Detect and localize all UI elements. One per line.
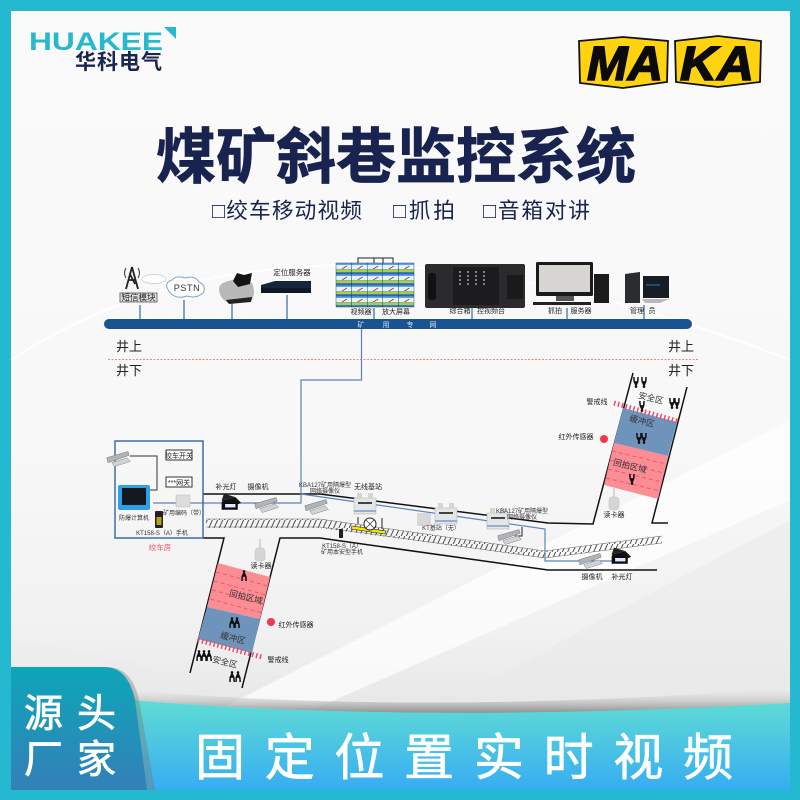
icon: printer [219, 273, 254, 304]
subtitle features: □抓拍 [393, 198, 455, 223]
equipment along the incline: KBA127矿用隔爆型 [496, 507, 548, 515]
side badge: 家 [77, 739, 116, 782]
logo: MA KA: KA [680, 38, 754, 91]
icon: PSTN cloud: PSTN [174, 283, 200, 293]
icon: SMS module [120, 267, 166, 302]
upper portal zones: 缓冲区 [628, 413, 656, 429]
bottom banner [130, 688, 790, 790]
winch room [107, 441, 205, 552]
integrated console: 控视频台 [477, 306, 505, 315]
capture computer: 服务器 [570, 306, 592, 315]
logo: MA KA [579, 36, 761, 91]
integrated console: 综合箱 [450, 306, 470, 315]
lower portal zones: 红外传感器 [278, 620, 314, 629]
bottom banner: 固定位置实时视频 [195, 730, 733, 786]
equipment along the incline: 补光灯 [612, 572, 632, 581]
upper portal zones: 警戒线 [586, 397, 608, 406]
lower portal zones: 警戒线 [268, 655, 288, 664]
admin machine [625, 272, 669, 315]
lower portal zones [197, 539, 314, 682]
side badge: 头 [77, 693, 116, 736]
network bus: 用 [382, 321, 390, 329]
equipment along the incline: 补光灯 [216, 482, 236, 491]
subtitle features [212, 198, 590, 223]
surface and underground labels: 井下 [668, 363, 694, 378]
equipment along the incline: KT基站（无） [422, 524, 460, 532]
subtitle features: □音箱对讲 [483, 198, 590, 223]
icon: positioning server [261, 267, 311, 293]
upper portal zones: 安全区 [637, 390, 665, 406]
winch room: ***网关 [168, 478, 190, 487]
subtitle features: □绞车移动视频 [212, 198, 362, 223]
lower portal zones: 回拍区域 [228, 588, 264, 606]
capture computer: 抓拍 [548, 306, 562, 315]
network bus: 矿 [358, 320, 364, 329]
icon: positioning server: 定位服务器 [273, 267, 311, 277]
equipment along the incline: 无线基站 [354, 482, 382, 491]
admin machine: 管理 [630, 306, 644, 315]
winch car: KT158-S（A） [322, 543, 362, 550]
network bus: 专 [406, 320, 414, 329]
upper portal zones: 红外传感器 [558, 432, 594, 441]
network cable [153, 329, 612, 561]
title: 煤矿斜巷监控系统 [156, 124, 636, 191]
equipment along the incline: 网络摄像仪 [310, 487, 340, 495]
icon: PSTN cloud [167, 277, 204, 297]
logo: Huakee [29, 27, 176, 74]
winch room: 防爆计算机 [119, 514, 149, 522]
lower portal zones: 读卡器 [250, 561, 272, 570]
tunnel walls [190, 373, 687, 688]
upper portal zones: 读卡器 [604, 510, 624, 519]
winch car [321, 517, 386, 556]
lower portal zones: 安全区 [211, 654, 239, 670]
icon: SMS module: 短信模块 [121, 292, 156, 302]
video wall: 放大屏幕 [382, 307, 410, 316]
winch car: 矿用本安型手机 [321, 548, 363, 556]
logo: Huakee: 华科电气 [75, 51, 162, 74]
logo: Huakee: HUAKEE [29, 28, 163, 56]
surface and underground labels: 井上 [668, 339, 694, 354]
upper portal zones [558, 377, 679, 519]
equipment along the incline: KBA127矿用隔爆型 [299, 481, 351, 489]
rails [206, 519, 662, 558]
winch room: 绞车房 [149, 542, 171, 552]
winch room: 绞车开关 [165, 451, 193, 460]
side badge: 源 [24, 693, 63, 736]
equipment along the incline [216, 481, 632, 581]
surface and underground labels: 井上 [116, 339, 142, 354]
winch room: KT158-S（A）手机 [136, 529, 188, 537]
logo: MA KA: MA [587, 38, 663, 91]
equipment along the incline: 摄像机 [248, 482, 268, 491]
surface and underground labels: 井下 [116, 363, 142, 378]
side badge [11, 667, 155, 790]
side badge: 厂 [24, 739, 63, 782]
capture computer [533, 262, 609, 315]
upper portal zones: 回拍区域 [612, 457, 648, 475]
integrated console [425, 264, 525, 315]
lower portal zones: 缓冲区 [219, 630, 247, 646]
network bus [104, 295, 692, 329]
network bus: 网 [430, 321, 436, 329]
surface and underground labels [108, 339, 698, 378]
equipment along the incline: 摄像机 [582, 572, 602, 581]
video wall [336, 258, 414, 316]
video wall: 视频器 [350, 307, 372, 316]
equipment along the incline: 网络摄像仪 [507, 513, 537, 521]
winch room: 矿用编码（带） [163, 509, 205, 517]
admin machine: 员 [648, 307, 656, 315]
